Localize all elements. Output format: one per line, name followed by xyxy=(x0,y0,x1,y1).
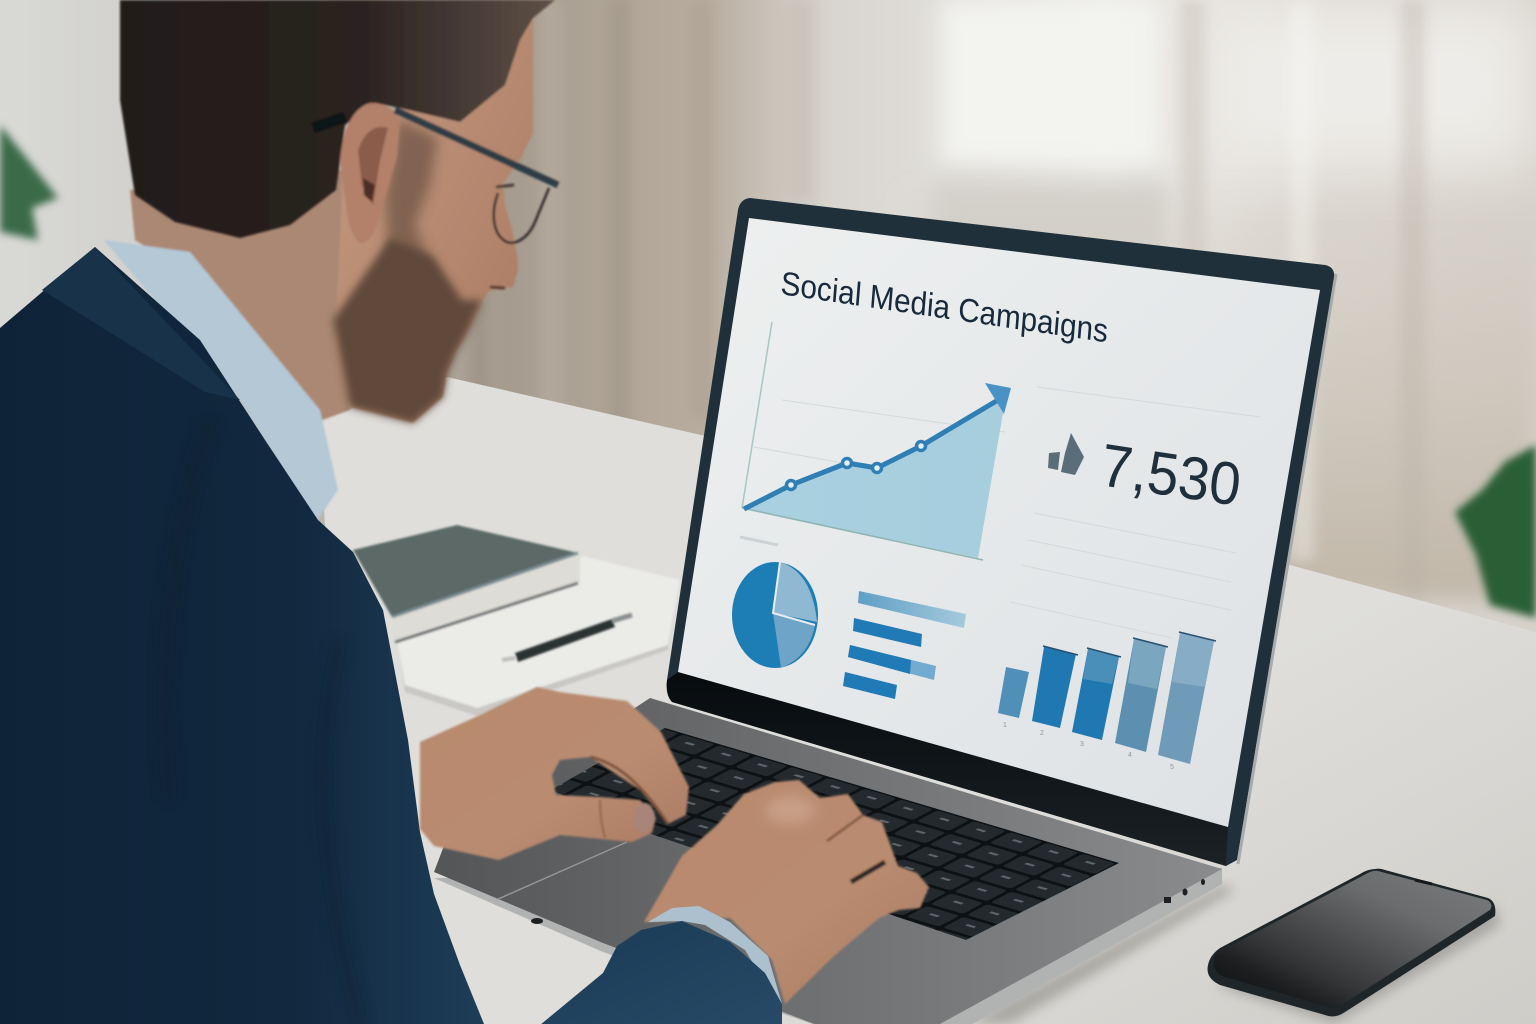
bar axis labels: 1 xyxy=(1003,722,1007,729)
man: head xyxy=(120,0,558,423)
like count: 7,530 xyxy=(1097,431,1245,519)
laptop screen: dashboard xyxy=(678,218,1320,827)
line chart xyxy=(742,322,1011,560)
laptop base and keyboard xyxy=(434,698,1222,1024)
bar axis labels: 2 xyxy=(1040,730,1044,737)
notebook on the desk xyxy=(353,525,580,642)
sideburn and stubble xyxy=(385,118,438,270)
eye xyxy=(496,185,514,187)
paper pad on the desk xyxy=(397,556,680,716)
bar axis labels: 4 xyxy=(1128,752,1132,759)
like counter xyxy=(1048,431,1245,519)
man: right hand on the keyboard xyxy=(644,780,929,1004)
man: jacket body xyxy=(0,247,484,1024)
man: left hand on the keyboard xyxy=(420,687,689,860)
horizontal bars xyxy=(843,591,966,699)
keyboard xyxy=(551,728,1119,940)
grid lines xyxy=(754,387,1260,638)
icon: thumbs up xyxy=(1048,433,1084,475)
small chart caption xyxy=(740,537,778,545)
desk surface xyxy=(318,377,1536,1024)
vertical bars xyxy=(998,632,1216,764)
nostril xyxy=(490,287,505,288)
bar axis labels xyxy=(1003,722,1174,771)
trackpad edge xyxy=(496,842,627,900)
laptop screen bezel xyxy=(667,198,1336,866)
pie chart xyxy=(732,562,818,668)
glasses xyxy=(313,110,558,243)
side ports xyxy=(531,879,1205,924)
phone on the desk xyxy=(1208,869,1500,1024)
ear xyxy=(340,103,400,243)
shadow under the laptop xyxy=(965,885,1235,1024)
thumbnail xyxy=(633,803,655,833)
bar axis labels: 3 xyxy=(1080,741,1084,748)
plant: right background xyxy=(1455,445,1536,618)
plant: left background xyxy=(0,125,58,240)
hair xyxy=(120,0,555,238)
man: jacket sleeve and shirt cuff xyxy=(534,906,782,1024)
screen heading: Social Media Campaigns xyxy=(779,265,1109,350)
beard xyxy=(333,238,482,423)
man: neck and shirt collar xyxy=(104,170,350,522)
bar axis labels: 5 xyxy=(1170,764,1174,771)
pen on the paper xyxy=(502,615,632,662)
